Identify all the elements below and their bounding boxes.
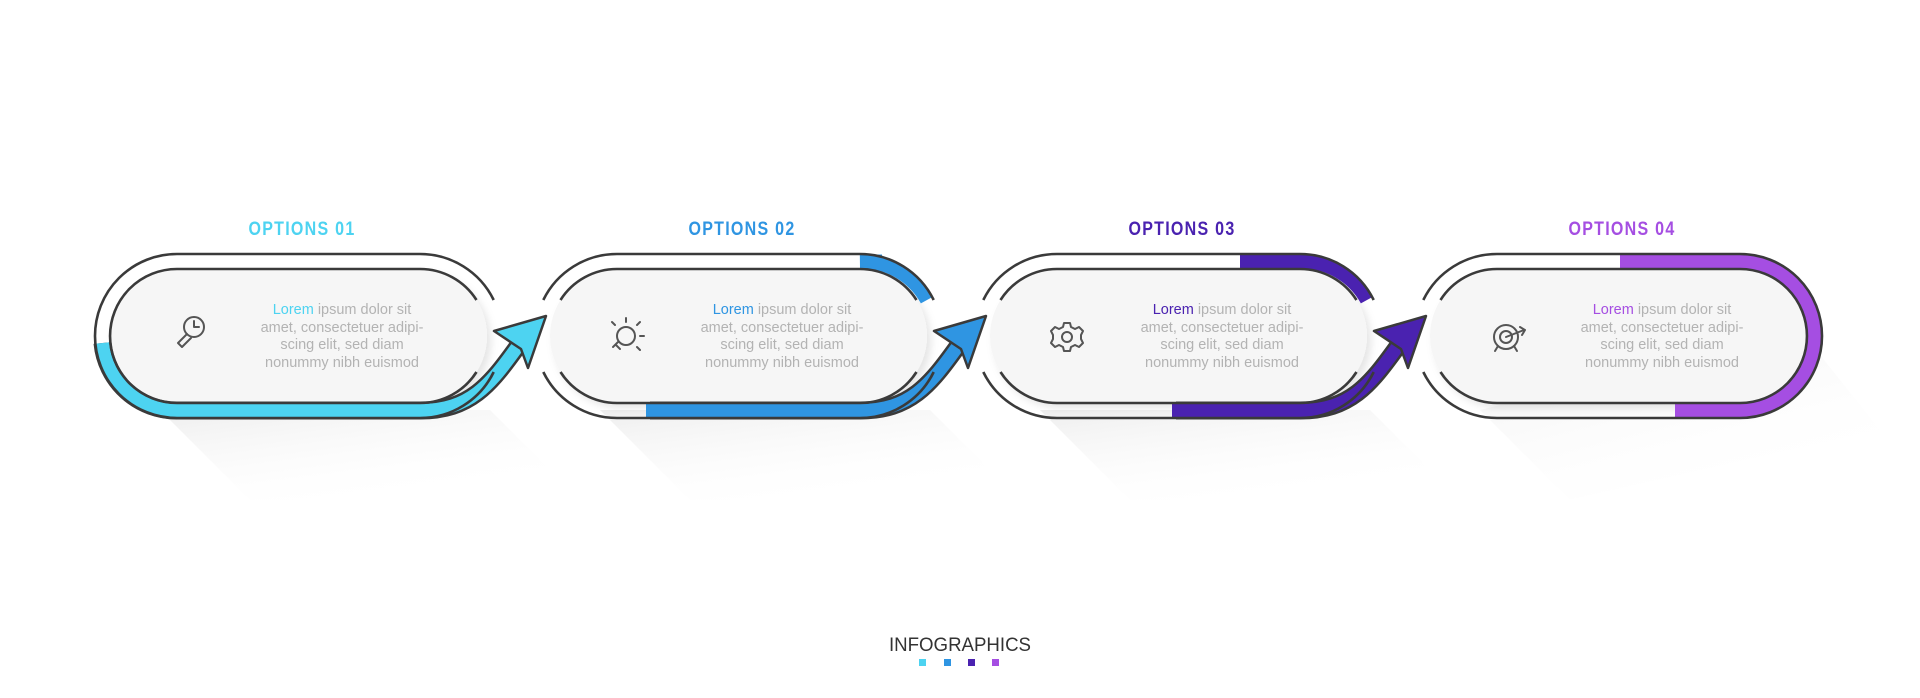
band: indigo [1172,261,1398,410]
band: blue [646,261,958,410]
title: options 03: OPTIONS 03 [1128,219,1236,240]
icon: magnifier clock [178,317,204,347]
text block: Lorem ipsum dolor sit [273,302,411,318]
text block: Lorem ipsum dolor sit [1153,302,1291,318]
arrow head [494,316,546,368]
text block [261,302,424,371]
text block: nonummy nibh euismod [265,355,419,371]
text block [1141,302,1304,371]
title: options 04: OPTIONS 04 [1568,219,1676,240]
text block: amet, consectetuer adipi- [701,320,864,336]
text block: scing elit, sed diam [1600,337,1724,353]
footer title: INFOGRAPHICS [889,635,1031,656]
text block [701,302,864,371]
panel: options 02 [543,219,986,418]
arrow head [934,316,986,368]
text block: scing elit, sed diam [280,337,404,353]
text block: scing elit, sed diam [720,337,844,353]
text block: Lorem ipsum dolor sit [1593,302,1731,318]
color squares [919,659,999,666]
panel: options 03 [983,219,1426,418]
text block: Lorem ipsum dolor sit [713,302,851,318]
text block: amet, consectetuer adipi- [261,320,424,336]
text block: scing elit, sed diam [1160,337,1284,353]
text block: nonummy nibh euismod [1145,355,1299,371]
text block [1581,302,1744,371]
icon: target [1494,325,1525,351]
text block: nonummy nibh euismod [705,355,859,371]
text block: amet, consectetuer adipi- [1141,320,1304,336]
icon: light bulb [612,318,644,350]
text block: nonummy nibh euismod [1585,355,1739,371]
title: options 01: OPTIONS 01 [248,219,356,240]
icon: gear [1051,323,1083,351]
long shadows [160,330,1880,500]
text block: amet, consectetuer adipi- [1581,320,1744,336]
band: cyan [102,343,518,411]
panel: options 04 [1423,219,1822,418]
arrow head [1374,316,1426,368]
title: options 02: OPTIONS 02 [688,219,796,240]
panel: options 01 [95,219,546,418]
band: purple [1620,262,1814,410]
